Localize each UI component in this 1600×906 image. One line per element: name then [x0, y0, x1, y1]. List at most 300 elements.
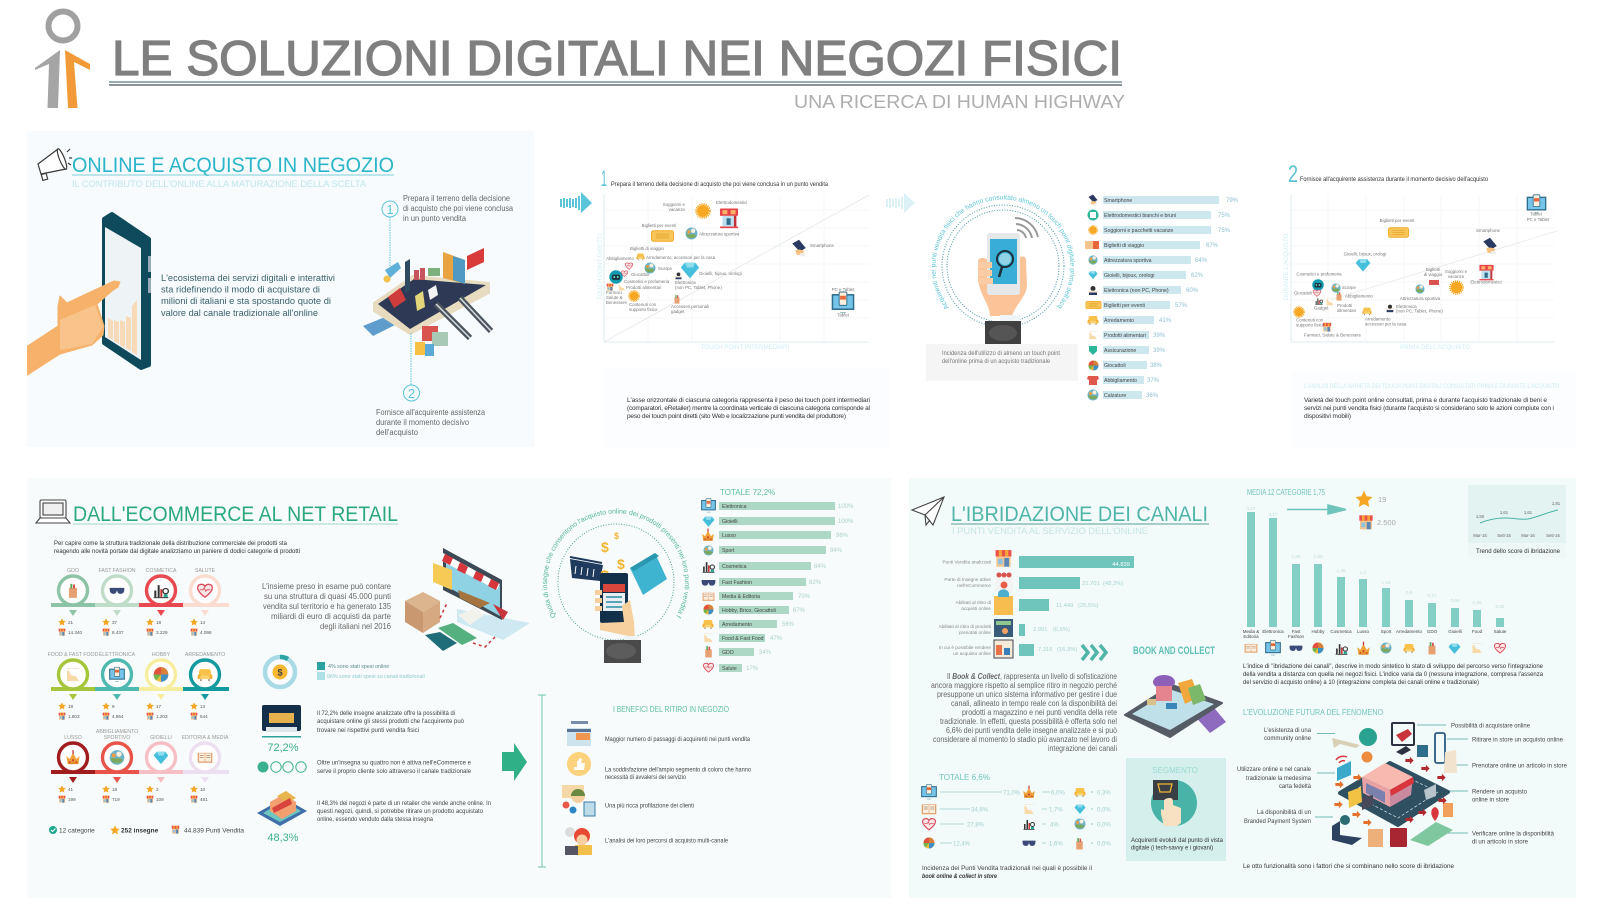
book online totals: 12,4%: [953, 842, 971, 848]
data labels: Biglietti per eventi: [1380, 218, 1414, 223]
data labels: Attrezzatura sportiva: [699, 232, 740, 236]
legend: totals: [49, 825, 244, 834]
chart title: Fornisce all'acquirente assistenza durante il momento decisivo dell'acquisto: [1300, 176, 1488, 183]
bar chart heading: TOTALE 72,2%: [720, 488, 775, 497]
benefit: store traffic: Maggior numero di passaggi di acquirenti nei punti vendita: [605, 736, 750, 743]
note box: [1292, 372, 1576, 447]
right feature labels: Prenotare online un articolo in store: [1472, 762, 1567, 770]
funnel bar chart: acquisti online: [961, 606, 991, 611]
right feature labels: di un articolo in store: [1472, 838, 1528, 846]
text: sample description: miliardi di euro di acquisti da parte: [271, 612, 391, 621]
note box: (comparatori, eRetailer) mentre la coordinata verticale di ciascuna categoria corrisponde al: [627, 405, 871, 412]
intro text: [54, 540, 300, 555]
category: abbigliamento sportivo: [95, 729, 139, 803]
text: book and collect: integrazione dei canali: [1048, 744, 1117, 753]
data labels: Biglietti di viaggio: [630, 246, 665, 251]
category: fast fashion: [95, 568, 139, 636]
scatter chart: DURANTE L'ACQUISTO: [1284, 233, 1290, 300]
column chart: hybridisation score: Lusso: [1357, 629, 1369, 634]
funnel bar chart: prenotati online: [959, 630, 991, 635]
trend box: Mar-16: [1521, 533, 1535, 538]
bracket line: [538, 695, 546, 867]
trend box: 1,61: [1500, 510, 1509, 515]
column chart: hybridisation score: 3,17: [1269, 512, 1278, 517]
subheading: IL CONTRIBUTO DELL'ONLINE ALLA MATURAZIONE DELLA SCELTA: [72, 179, 366, 189]
text: sample description: degli italiani nel 2016: [320, 622, 391, 631]
column chart: hybridisation score: Media &: [1243, 629, 1259, 634]
data labels: Scarpe: [1342, 285, 1356, 290]
bar chart: stores with online purchase: GDO: [722, 650, 734, 656]
category: GDO: 14.340: [68, 630, 82, 635]
category: arredamento: [183, 652, 229, 720]
curved caption: Acquirenti nei punti vendita fisici che hanno consultato almeno un touch point digitale prima dell'acquisto: [930, 194, 1076, 309]
benefit: customer satisfaction: [567, 752, 751, 781]
bar chart: stores with online purchase: Salute: [722, 666, 737, 672]
text: point 1: [403, 194, 514, 223]
benefit: customer satisfaction: La soddisfazione dell'ampio segmento di coloro che hanno: [605, 766, 751, 774]
category: GDO: [51, 568, 95, 636]
data labels: Contenuti con: [629, 302, 657, 307]
note box: L'ANALISI DELLA VARIETÀ DEI TOUCH POINT DIGITALI CONSULTATI PRIMA E DURANTE L'ACQUISTO: [1304, 383, 1559, 390]
category: elettronica: ELETTRONICA: [99, 652, 136, 658]
bar chart: stores with online purchase: 100%: [838, 519, 854, 525]
column chart: hybridisation score: Sport: [1381, 629, 1392, 634]
subheading: I PUNTI VENDITA AL SERVIZIO DELL'ONLINE: [952, 526, 1148, 536]
legend: totals: 252 insegne: [121, 828, 159, 834]
bar chart: touch point by category: Elettrodomestici bianchi e bruni: [1104, 213, 1176, 219]
data labels: Scarpe: [658, 266, 672, 271]
panel: touch point incidence: [109, 194, 1239, 400]
arrow: [1287, 505, 1346, 514]
category: lusso: LUSSO: [64, 735, 82, 741]
funnel bar chart: In cui è possibile rendere: [939, 645, 991, 650]
category: elettronica: 4.954: [112, 714, 124, 719]
data labels: Prodotti: [1337, 303, 1352, 308]
column chart: hybridisation score: 1,80: [1314, 554, 1323, 559]
column chart: hybridisation score: Fashion: [1288, 634, 1304, 639]
note box: peso dei touch point diretti (sito Web e localizzazione punti vendita del produttore): [627, 413, 846, 420]
illustration: store with eight features: [1332, 723, 1457, 847]
category: food: [48, 652, 99, 720]
book online totals: 6,0%: [1051, 790, 1065, 796]
left feature labels: Utilizzare online e nel canale: [1237, 766, 1311, 773]
data labels: Gadget: [1314, 306, 1329, 310]
text: book and collect: Il Book & Collect, rappresenta un livello di sofisticazione: [947, 672, 1118, 681]
number 2: 2: [1288, 161, 1298, 188]
data labels: Giocattoli: [631, 272, 649, 277]
data labels: Accessori personali: [671, 304, 709, 309]
bar chart: stores with online purchase: 56%: [782, 622, 795, 628]
stat: one in four: [258, 760, 471, 775]
caption box: dell'online prima di un acquisto tradizionale: [942, 358, 1050, 365]
heading: future evolution: L'EVOLUZIONE FUTURA DEL FENOMENO: [1243, 708, 1383, 717]
stat: 72,2 percent: [262, 705, 464, 754]
funnel bar chart: Parte di Insegne attive: [944, 577, 991, 582]
legend: totals: 44.839 Punti Vendita: [184, 828, 244, 834]
column chart: hybridisation score: 0,65: [1451, 598, 1460, 603]
bar chart: touch point by category: 38%: [1150, 363, 1163, 369]
icon: laptop: [36, 500, 70, 523]
funnel bar chart: (25,5%): [1078, 603, 1098, 609]
illustration: smartphone shopping mall: [363, 248, 491, 356]
legend: online vs traditional: 4% sono stati spesi online: [328, 664, 389, 670]
bar chart: touch point by category: 36%: [1146, 393, 1159, 399]
column chart: hybridisation score: 0,8: [1406, 590, 1413, 595]
bar chart: touch point by category: [1085, 194, 1239, 400]
text: sample description: [262, 582, 391, 631]
heading: MEDIA 12 CATEGORIE 1,75: [1247, 488, 1325, 497]
bar chart: touch point by category: Assicurazione: [1104, 348, 1136, 354]
text: ecosystem description: L'ecosistema dei servizi digitali e interattivi: [161, 273, 335, 284]
left feature labels: community online: [1264, 735, 1311, 742]
data labels: Elettronica: [675, 280, 696, 285]
stat: 48,3 percent: online, essendo venduto dalla stessa insegna: [317, 816, 433, 823]
panel: l'ibridazione dei canali: [909, 478, 1576, 898]
panel: online e acquisto in negozio: [27, 131, 534, 447]
top category stats: 19: [1378, 495, 1386, 504]
category: cosmetica: 3.229: [156, 630, 168, 635]
column chart: hybridisation score: Salute: [1494, 629, 1507, 634]
funnel bar chart: (16,3%): [1057, 647, 1077, 653]
trend box: Trend dello score di ibridazione: [1476, 548, 1560, 555]
bar chart: touch point by category: Biglietti di viaggio: [1104, 243, 1144, 249]
category: food: 18: [68, 704, 74, 709]
category: editoria e media: 10: [200, 787, 206, 792]
category: gioielli: 109: [156, 797, 164, 802]
data labels: Biglietti per eventi: [642, 223, 676, 228]
arrow: faded striped blue: [886, 193, 915, 213]
heading: book and collect: BOOK AND COLLECT: [1133, 645, 1215, 657]
text: point 1: di acquisto che poi viene conclusa: [403, 204, 514, 213]
text: ecosystem description: [161, 273, 335, 319]
bar chart: stores with online purchase: Sport: [722, 548, 735, 554]
column chart: hybridisation score: Fast: [1292, 629, 1301, 634]
bar chart: stores with online purchase: 67%: [793, 608, 806, 614]
text: point 2: [376, 408, 486, 437]
left feature labels: [1237, 727, 1311, 825]
text: book and collect: 6,6% dei punti vendita delle insegne analizzate e si può: [946, 726, 1118, 735]
bar chart: stores with online purchase: Lusso: [722, 533, 736, 539]
illustration: hand with phone and shopping: $: [617, 556, 625, 572]
stat: 72,2 percent: acquistare online gli stessi prodotti che l'acquirente può: [317, 718, 464, 725]
marker 2: 2: [408, 386, 415, 401]
funnel bar chart: 21.701: [1082, 581, 1100, 587]
illustration: online store on monitor: [405, 548, 530, 651]
data labels: Elettrodomestici: [1470, 280, 1502, 284]
trend box: 1,61: [1524, 510, 1533, 515]
text: book and collect: considerare al momento lo stadio più avanzato nel lavoro di: [933, 735, 1117, 744]
marker 1: 1: [386, 202, 394, 217]
book online totals: 27,8%: [967, 822, 985, 828]
caption box: [926, 344, 1078, 381]
right feature labels: Rendere un acquisto: [1472, 788, 1527, 796]
icon: paper plane: [912, 497, 944, 525]
data labels: Gioielli, bijoux, orologi: [1344, 252, 1386, 256]
bar chart: touch point by category: 57%: [1175, 303, 1188, 309]
intro text: reagendo alle novità portate dal digitale analizziamo un paniere di dodici categorie di prodotti: [54, 548, 300, 555]
bar chart: touch point by category: Elettronica (non PC, Phone): [1104, 288, 1169, 294]
bar chart: stores with online purchase: 34%: [759, 650, 772, 656]
bar chart: stores with online purchase: 84%: [814, 564, 827, 570]
bar chart: touch point by category: Smartphone: [1104, 198, 1132, 204]
category: arredamento: 544: [200, 714, 208, 719]
data labels: di viaggio: [1424, 272, 1443, 277]
data labels: Attrezzatura sportiva: [1400, 296, 1441, 301]
bar chart: touch point by category: 79%: [1226, 198, 1239, 204]
bar chart: stores with online purchase: 82%: [809, 580, 822, 586]
text: book and collect: ancora maggiore rispetto al semplice ritiro in negozio perché: [931, 681, 1118, 690]
data labels: Benessere: [606, 300, 628, 305]
panel: segmento: SEGMENTO: [1152, 766, 1198, 775]
book online totals: 1,6%: [1049, 842, 1063, 848]
bar chart: touch point by category: Calzature: [1104, 393, 1126, 399]
column chart: hybridisation score: 1,45: [1337, 568, 1346, 573]
category: abbigliamento sportivo: ABBIGLIAMENTO: [96, 729, 138, 735]
data labels: Cosmetici e profumeria: [1296, 272, 1342, 276]
left feature labels: carta fedeltà: [1279, 783, 1311, 790]
book online totals: 0,0%: [1097, 822, 1111, 828]
bar chart: stores with online purchase: [702, 488, 854, 672]
subtitle: UNA RICERCA DI HUMAN HIGHWAY: [794, 91, 1125, 112]
category: cosmetica: 18: [156, 620, 162, 625]
bar chart: stores with online purchase: Cosmetica: [722, 564, 747, 570]
marker 2: [404, 333, 420, 401]
legend: totals: 12 categorie: [59, 828, 95, 834]
data labels: Farmaci, Salute & Benessere: [1304, 332, 1362, 338]
category: gioielli: [139, 735, 183, 803]
text: point 1: in un punto vendita: [403, 214, 467, 223]
column chart: hybridisation score: Editoria: [1243, 634, 1259, 639]
bar chart: stores with online purchase: 47%: [770, 636, 783, 642]
data points: [607, 204, 854, 313]
bar chart: touch point by category: Abbigliamento: [1104, 378, 1137, 384]
marker 1: [382, 201, 398, 274]
data labels: Contenuti con: [1296, 318, 1324, 322]
heading: TOTALE 6,6%: [939, 773, 990, 782]
column chart: hybridisation score: 0,59: [1473, 600, 1482, 605]
icon: megaphone: [38, 148, 72, 180]
data labels: (non PC, Tablet, Phone): [1396, 308, 1443, 314]
illustration: phone with store: [1125, 675, 1226, 737]
data labels: Smartphone: [1476, 228, 1501, 233]
data labels: Soggiorni e: [1445, 269, 1468, 274]
heading: ONLINE E ACQUISTO IN NEGOZIO: [72, 153, 394, 177]
category: editoria e media: EDITORIA & MEDIA: [182, 735, 229, 741]
category: editoria e media: 481: [200, 797, 208, 802]
data labels: supporto fisico: [629, 307, 658, 312]
benefit: path analysis: L'analisi dei loro percorsi di acquisto multi-canale: [605, 838, 728, 844]
caption box: Incidenza dell'utilizzo di almeno un touch point: [942, 350, 1060, 357]
data labels: PC e Tablet: [1527, 217, 1550, 222]
text: ecosystem description: milioni di italiani e sta spostando quote di: [161, 296, 331, 307]
bar chart: touch point by category: Prodotti alimentari: [1104, 333, 1146, 339]
category: gioielli: GIOIELLI: [150, 735, 172, 741]
scatter chart: [1284, 195, 1557, 351]
data labels: Arredamento: [1365, 316, 1391, 322]
note box: L'asse orizzontale di ciascuna categoria rappresenta il peso dei touch point intermediari: [627, 397, 870, 404]
bar chart: touch point by category: 67%: [1206, 243, 1219, 249]
dotted ring: [558, 524, 674, 640]
category: cosmetica: [139, 568, 183, 636]
data labels: Elettronica: [1396, 304, 1417, 309]
trend box: Sett-15: [1497, 533, 1512, 538]
data points: [1294, 195, 1546, 332]
text: point 1: Prepara il terreno della decisione: [403, 194, 510, 203]
category: hobby: 17: [156, 704, 162, 709]
text: hybridisation index: della vendita a distanza con quella nei negozi fisici. L'indice varia da 0 (nessuna integrazione, compresa l'assenza: [1243, 671, 1543, 678]
category: abbigliamento sportivo: 18: [112, 787, 118, 792]
data labels: [1294, 212, 1550, 338]
data labels: Arredamento, accessori per la casa: [646, 255, 716, 260]
data labels: accessori per la casa: [1365, 322, 1407, 326]
category: lusso: [51, 735, 95, 803]
left feature labels: L'esistenza di una: [1264, 727, 1311, 734]
data labels: supporto fisico: [1296, 322, 1325, 328]
funnel bar chart: un acquisto online: [953, 651, 991, 656]
column chart: hybridisation score: 1,4: [1360, 570, 1367, 575]
category: salute: SALUTE: [195, 568, 216, 574]
category: hobby: [139, 652, 183, 720]
bar chart: touch point by category: 62%: [1191, 273, 1204, 279]
bar chart: touch point by category: Gioielli, bijoux, orologi: [1104, 273, 1154, 279]
bar chart: stores with online purchase: Media & Editoria: [722, 594, 760, 600]
category: arredamento: ARREDAMENTO: [185, 652, 225, 658]
data labels: Gioielli, bijoux, orologi: [699, 271, 742, 276]
funnel bar chart: nell'eCommerce: [957, 583, 991, 588]
bar chart: touch point by category: Biglietti per eventi: [1104, 303, 1145, 309]
category: elettronica: [95, 652, 139, 720]
funnel bar chart: Abilitati al ritiro di prodotti: [939, 624, 991, 629]
panel: segmento: digitale (i tech-savvy e i giovani): [1131, 844, 1213, 852]
category: cosmetica: COSMETICA: [146, 568, 177, 574]
bar chart: stores with online purchase: 17%: [746, 666, 759, 672]
panel: touch point scatter 1: [598, 166, 890, 447]
bar chart: touch point by category: 41%: [1159, 318, 1172, 324]
heading: L'IBRIDAZIONE DEI CANALI: [951, 502, 1208, 526]
category: fast fashion: 8.437: [112, 630, 124, 635]
category: salute: 14: [200, 620, 206, 625]
category: elettronica: 9: [112, 704, 115, 709]
illustration: hand with phone and shopping: $: [601, 539, 609, 555]
category: lusso: 199: [68, 797, 76, 802]
data labels: Abbigliamento: [606, 256, 634, 261]
text: sample description: L'insieme preso in esame può contare: [262, 582, 391, 591]
category: salute: 4.098: [200, 630, 212, 635]
right feature labels: Possibilità di acquistare online: [1451, 722, 1530, 730]
donut: online share: [265, 657, 295, 687]
stat: 72,2 percent: 72,2%: [267, 742, 299, 754]
book online totals: 0,0%: [1097, 808, 1111, 814]
note box: servizi nei punti vendita fisici (durante l'acquisto si considerano solo le azioni compiute con i: [1304, 405, 1554, 412]
funnel bar chart: Abilitati al ritiro di: [956, 600, 991, 605]
data labels: Biglietti: [1426, 267, 1440, 272]
data labels: Smartphone: [810, 243, 834, 248]
column chart: hybridisation score: GDO: [1427, 629, 1438, 634]
text: ecosystem description: valore dal canale tradizionale all'online: [161, 308, 318, 319]
text: sample description: su una struttura di quasi 45.000 punti: [264, 592, 391, 601]
right feature labels: online in store: [1472, 796, 1509, 804]
bar chart: touch point by category: Giocattoli: [1104, 363, 1126, 369]
book online totals: 71,0%: [1003, 790, 1021, 796]
funnel bar chart: (6,6%): [1053, 627, 1070, 633]
text: hybridisation index: L'indice di "ibridazione dei canali", descrive in modo sintetico lo stato di sviluppo del percorso verso l'integrazione: [1243, 663, 1543, 670]
logo: stylised person: [35, 12, 90, 108]
funnel bar chart: 44.839: [1112, 562, 1130, 568]
note box: [604, 367, 890, 447]
curved caption: quota insegne: Quota di insegne che consentono l'acquisto online dei prodotti presenti nei loro punti vendita fisici: [542, 508, 690, 619]
bar chart: stores with online purchase: Gioielli: [722, 519, 738, 525]
bar chart: stores with online purchase: 96%: [836, 533, 849, 539]
left feature labels: tradizionale la medesima: [1246, 775, 1311, 782]
data labels: Tablet: [837, 312, 850, 318]
category: GDO: 21: [68, 620, 74, 625]
category: food: FOOD & FAST FOOD: [48, 652, 99, 658]
book online totals: 34,8%: [971, 808, 989, 814]
bar chart: touch point by category: 60%: [1186, 288, 1199, 294]
header: logo and title: [35, 12, 1125, 112]
text: book and collect: [931, 672, 1118, 753]
category: hobby: 1.203: [156, 714, 168, 719]
funnel bar chart: [939, 550, 1134, 658]
text: point 2: dell'acquisto: [376, 428, 419, 437]
column chart: hybridisation score: 1,80: [1292, 554, 1301, 559]
trend box: Sett-16: [1546, 533, 1561, 538]
bar chart: stores with online purchase: Hobby, Brico, Giocattoli: [722, 608, 776, 614]
legend: online vs traditional: [317, 662, 425, 680]
stat: one in four: Oltre un'insegna su quattro non è attiva nell'eCommerce e: [317, 760, 471, 766]
data labels: Salute &: [606, 295, 623, 300]
category: editoria e media: [182, 735, 229, 803]
illustration: hand with phone and shopping: $: [600, 567, 610, 586]
column chart: hybridisation score: Gioielli: [1448, 629, 1462, 634]
title: LE SOLUZIONI DIGITALI NEI NEGOZI FISICI: [112, 32, 1122, 86]
data labels: Elettrodomestici: [716, 200, 747, 205]
data labels: Prodotti alimentari: [626, 285, 661, 290]
right feature labels: [1451, 722, 1567, 846]
bar chart: stores with online purchase: Elettronica: [722, 504, 747, 510]
axis labels: TOUCH POINT INTERMEDIARI: [701, 344, 790, 351]
top category stats: 2.500: [1377, 518, 1396, 527]
stat: 72,2 percent: Il 72,2% delle insegne analizzate offre la possibilità di: [317, 710, 455, 717]
bar chart: stores with online purchase: 100%: [838, 504, 854, 510]
intro text: Per capire come la struttura tradizionale della distribuzione commerciale dei prodotti sta: [54, 540, 287, 547]
top category stats: [1355, 491, 1396, 529]
book online totals: 4%: [1050, 822, 1059, 828]
book online totals: book online & collect in store: [922, 873, 997, 880]
arrow: green striped: [502, 743, 527, 781]
text: ecosystem description: sta ridefinendo il modo di acquistare di: [161, 284, 320, 296]
category: abbigliamento sportivo: SPORTIVO: [104, 735, 130, 741]
left feature labels: Branded Payment System: [1244, 818, 1311, 825]
text: book and collect: presuppone un unico sistema informativo per gestire i due: [937, 690, 1118, 699]
bar chart: touch point by category: 39%: [1153, 333, 1166, 339]
right feature labels: Ritirare in store un acquisto online: [1472, 736, 1563, 744]
category: abbigliamento sportivo: 719: [112, 797, 120, 802]
text: hybridisation index: [1243, 663, 1543, 686]
panel: touch point scatter 1: 1: [601, 166, 607, 191]
data labels: PC e Tablet: [832, 287, 855, 292]
column chart: hybridisation score: 1,18: [1382, 580, 1391, 585]
illustration: hand holding phone: [978, 218, 1038, 344]
legend: online vs traditional: 96% sono stati spesi su canali tradizionali: [327, 674, 425, 680]
data labels: Giocattoli: [1294, 290, 1312, 296]
bar chart: touch point by category: 64%: [1195, 258, 1208, 264]
column chart: hybridisation score: 0,71: [1428, 593, 1437, 598]
trend box: 1,50: [1476, 514, 1485, 519]
funnel bar chart: 7.316: [1038, 647, 1053, 653]
category: salute: [183, 568, 229, 636]
text: book and collect: prodotti a magazzino e nei punti vendita della rete: [962, 708, 1118, 717]
